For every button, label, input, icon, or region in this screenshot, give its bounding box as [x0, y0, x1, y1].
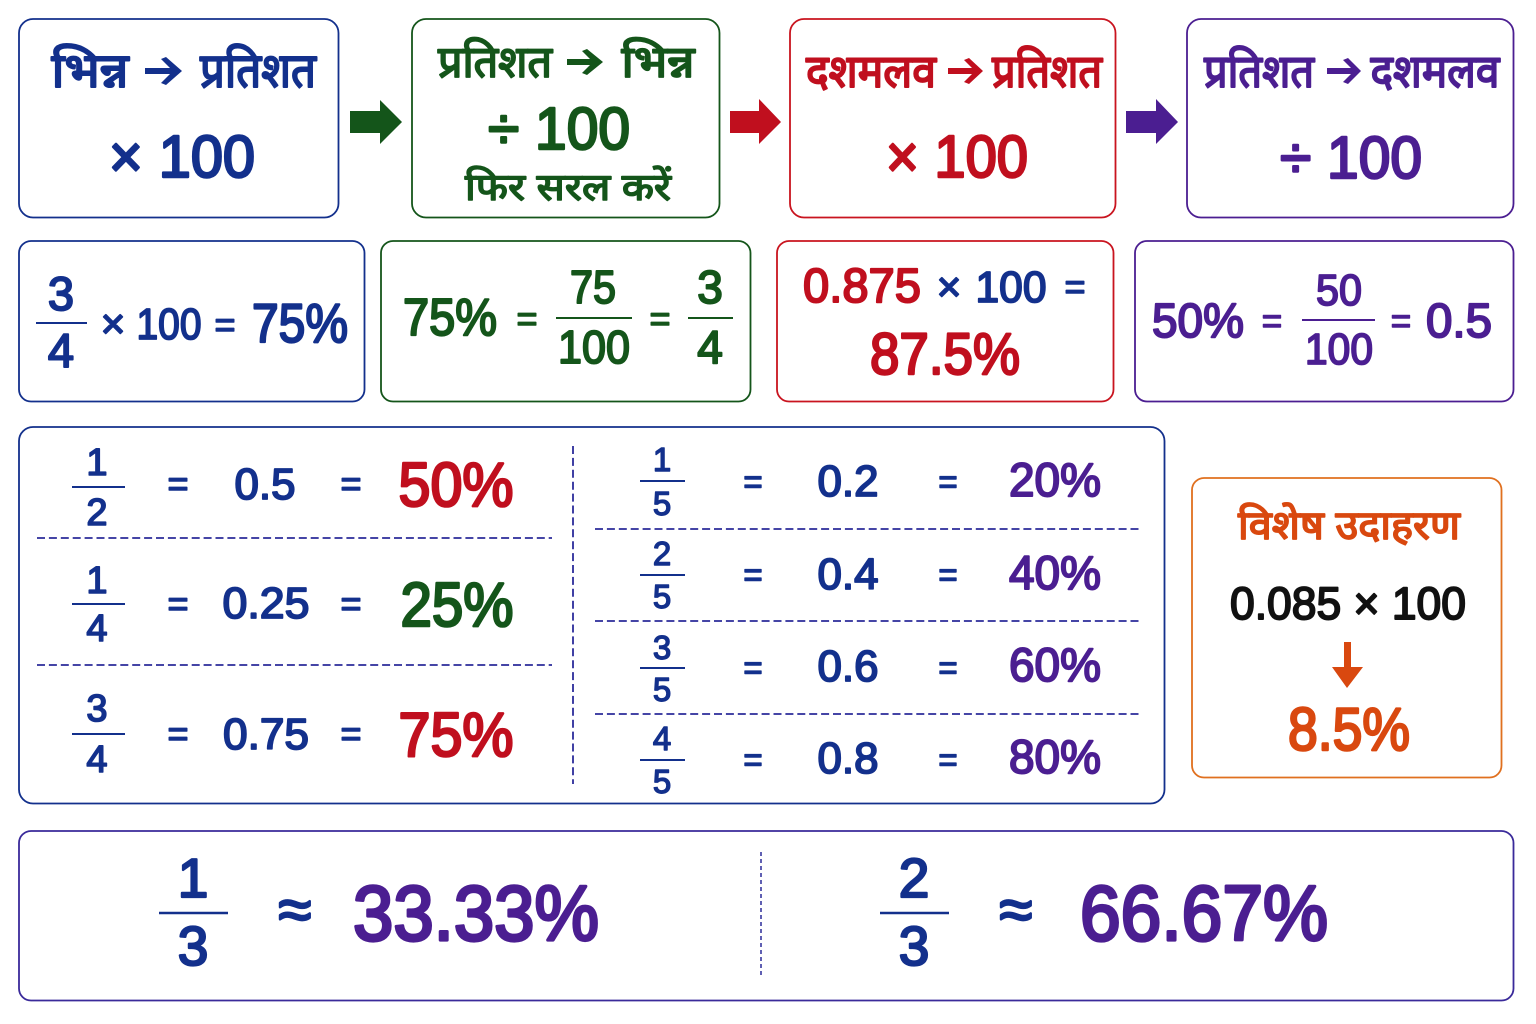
row: one half: 1 [86, 442, 108, 484]
panel: percent to decimal rule [1187, 19, 1514, 218]
panel: example 75 percent to fraction: 75 [570, 261, 616, 313]
panel: example 50 percent to decimal [1135, 241, 1514, 402]
approximation: two thirds: 66.67% [1080, 869, 1328, 957]
panel: example 0.875 to percent: × [937, 263, 961, 310]
panel: example 75 percent to fraction: 100 [558, 321, 630, 373]
rule: divide by 100: ÷ 100 [1280, 125, 1422, 191]
panel: example 0.875 to percent [777, 241, 1114, 402]
icon: down arrow [1332, 642, 1363, 688]
panel: example 75 percent to fraction: 75% [403, 289, 497, 347]
panel: percent to fraction rule [412, 19, 720, 218]
panel: approximations [19, 831, 1514, 1000]
approximation: two thirds: 2 [899, 847, 929, 909]
row: one fifth: = [938, 463, 958, 500]
rule: divide by 100: ÷ 100 [488, 96, 630, 162]
heading: decimal to percent [806, 45, 1103, 97]
row: one half [72, 442, 514, 534]
row: two fifths: 40% [1009, 546, 1101, 599]
row: two fifths: = [938, 556, 958, 593]
heading: percent to decimal: दशमलव [1370, 45, 1501, 97]
heading: percent to decimal: प्रतिशत [1204, 45, 1315, 97]
row: three quarters: = [340, 713, 362, 754]
row: one half: 2 [86, 492, 108, 534]
panel: example 50 percent to decimal: 50% [1152, 295, 1244, 348]
approximation: two thirds: ≈ [1000, 876, 1032, 943]
heading: percent to fraction [438, 37, 695, 87]
panel: example 50 percent to decimal: 50 [1316, 266, 1362, 315]
note: then simplify: फिर सरल करें [465, 165, 673, 209]
panel: example 75 percent to fraction [381, 241, 750, 402]
approximation: one third: 33.33% [353, 869, 599, 957]
row: one half: 0.5 [234, 460, 296, 509]
row: one quarter: = [340, 583, 362, 624]
row: four fifths: 0.8 [818, 734, 878, 783]
row: one fifth: 0.2 [818, 457, 878, 506]
panel: example three quarters to percent [19, 241, 364, 402]
rule: times 100: × 100 [109, 124, 255, 190]
approximation: one third: 3 [178, 915, 208, 977]
row: one quarter: 0.25 [222, 579, 310, 628]
heading: decimal to percent: दशमलव [806, 45, 937, 97]
approximation: two thirds: 3 [899, 915, 929, 977]
panel: example 0.875 to percent: 87.5% [870, 322, 1020, 387]
row: three fifths: 5 [653, 671, 671, 708]
calculation: 0.085 × 100 [1230, 578, 1466, 629]
row: two fifths: 2 [653, 535, 671, 572]
panel: example 0.875 to percent: 100 [976, 263, 1046, 312]
row: four fifths: 5 [653, 763, 671, 800]
row: two fifths: 5 [653, 578, 671, 615]
row: three fifths: 3 [653, 629, 671, 666]
row: two fifths: = [743, 556, 763, 593]
row: three quarters: 3 [86, 688, 108, 730]
row: two fifths [640, 535, 1101, 615]
panel: example 50 percent to decimal: 0.5 [1426, 295, 1492, 348]
row: four fifths [640, 720, 1101, 800]
result: 8.5% [1288, 696, 1410, 763]
row: three fifths: 0.6 [818, 642, 878, 691]
row: one quarter: 25% [400, 571, 514, 640]
arrow: green [350, 100, 402, 144]
panel: example 75 percent to fraction: 3 [697, 261, 723, 313]
rule: times 100: × 100 [886, 124, 1028, 190]
row: three quarters: 0.75 [223, 710, 309, 759]
row: two fifths: 0.4 [818, 550, 878, 599]
panel: example three quarters to percent: 4 [48, 324, 74, 377]
arrow: red [730, 99, 781, 144]
panel: example three quarters to percent: = [214, 304, 236, 345]
row: one fifth: 5 [653, 485, 671, 522]
row: three quarters [72, 688, 514, 781]
row: three quarters: 4 [86, 739, 108, 781]
row: four fifths: 80% [1009, 730, 1101, 783]
panel: example three quarters to percent: × [101, 300, 125, 347]
row: four fifths: = [743, 741, 763, 778]
panel: example three quarters to percent: 75% [252, 292, 348, 354]
row: one quarter: 4 [86, 608, 108, 650]
panel: special example [1192, 478, 1502, 778]
row: one half: 50% [398, 451, 514, 520]
panel: example 0.875 to percent: = [1064, 266, 1086, 307]
row: four fifths: 4 [653, 720, 671, 757]
row: one fifth: 1 [653, 441, 671, 478]
heading: fraction to percent: प्रतिशत [200, 44, 317, 98]
row: three quarters: = [167, 713, 189, 754]
row: one fifth: = [743, 463, 763, 500]
row: four fifths: = [938, 741, 958, 778]
panel: example three quarters to percent: 3 [48, 267, 74, 320]
panel: example three quarters to percent: 100 [136, 300, 202, 349]
row: three fifths [640, 629, 1101, 708]
row: one half: = [167, 463, 189, 504]
row: three fifths: = [743, 649, 763, 686]
panel: example 0.875 to percent: 0.875 [803, 260, 921, 313]
panel: decimal to percent rule [790, 19, 1116, 218]
heading: fraction to percent [52, 44, 317, 98]
approximation: one third: ≈ [279, 876, 311, 943]
approximation: two thirds [880, 847, 1328, 977]
heading: percent to fraction: भिन्न [622, 37, 695, 87]
row: one fifth [640, 441, 1101, 522]
approximation: one third [159, 847, 599, 977]
heading: decimal to percent: प्रतिशत [992, 45, 1103, 97]
row: one half: = [340, 463, 362, 504]
panel: example 50 percent to decimal: 100 [1305, 325, 1373, 374]
heading: special example: विशेष उदाहरण [1238, 503, 1461, 548]
row: one quarter: 1 [86, 560, 108, 602]
panel: fraction to percent rule [19, 19, 338, 218]
panel: example 75 percent to fraction: = [649, 298, 671, 339]
panel: example 50 percent to decimal: = [1262, 302, 1282, 341]
row: three quarters: 75% [398, 701, 514, 770]
row: three fifths: = [938, 649, 958, 686]
arrow: purple [1126, 99, 1178, 144]
panel: example 50 percent to decimal: = [1391, 302, 1411, 341]
row: one fifth: 20% [1009, 453, 1101, 506]
heading: percent to fraction: प्रतिशत [438, 37, 553, 87]
panel: example 75 percent to fraction: = [516, 298, 538, 339]
approximation: one third: 1 [178, 847, 208, 909]
heading: percent to decimal [1204, 45, 1501, 97]
row: one quarter: = [167, 583, 189, 624]
heading: fraction to percent: भिन्न [52, 44, 130, 98]
panel: equivalents table [19, 427, 1164, 804]
row: three fifths: 60% [1009, 638, 1101, 691]
row: one quarter [72, 560, 514, 650]
panel: example 75 percent to fraction: 4 [697, 321, 723, 373]
